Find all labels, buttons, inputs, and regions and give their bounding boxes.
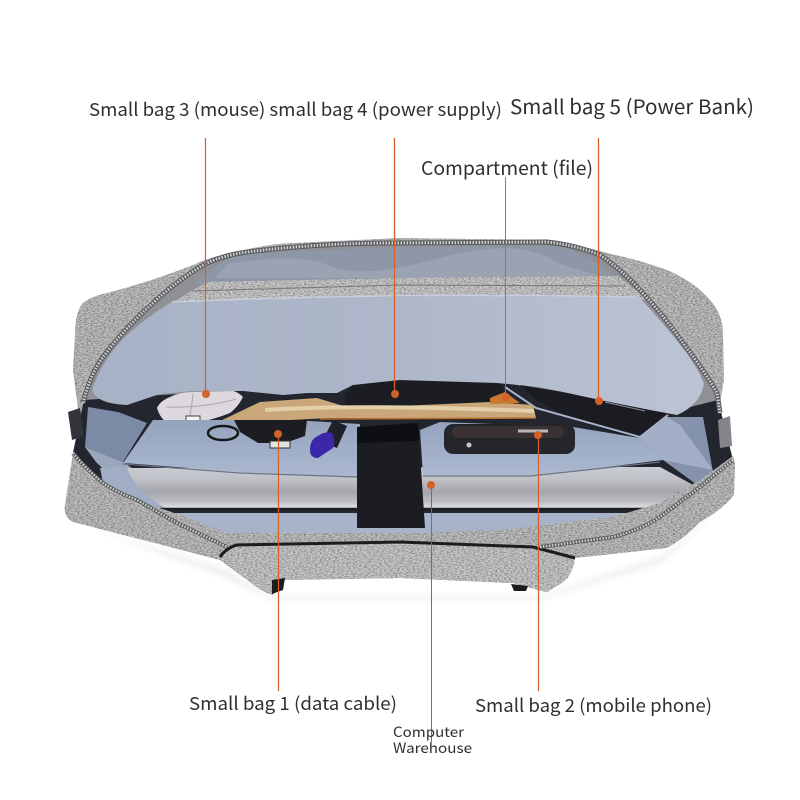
leader: small bag 4 — [391, 138, 399, 398]
right lining under laptop — [640, 487, 700, 517]
documents folder — [218, 398, 536, 422]
lower shell — [65, 453, 735, 595]
leader: small bag 5 — [595, 138, 603, 405]
front black trim — [220, 542, 575, 558]
interior dark lower — [73, 382, 733, 517]
power bank / phone — [444, 424, 575, 454]
mouse — [157, 391, 243, 425]
label: computer warehouse — [393, 722, 472, 758]
upper zipper — [83, 242, 720, 413]
right side lining — [640, 417, 713, 487]
front band highlight — [220, 542, 575, 595]
feet — [272, 578, 285, 594]
leader: small bag 1 — [274, 430, 282, 691]
power supply black — [345, 380, 505, 406]
label: small bag 1: Small bag 1 (data cable) — [189, 690, 397, 716]
ground shadow — [90, 510, 720, 600]
label: small bag 5: Small bag 5 (Power Bank) — [510, 91, 754, 120]
interior base — [73, 242, 733, 547]
folder pocket seam — [505, 387, 668, 437]
label: compartment: Compartment (file) — [421, 154, 593, 181]
power bank black — [520, 385, 668, 438]
back lining — [196, 246, 620, 284]
label: computer warehouse: Warehouse — [393, 738, 472, 758]
right side buckle — [718, 416, 732, 448]
left side buckle — [68, 408, 84, 440]
blue USB drive — [322, 420, 347, 448]
padded divider — [93, 296, 704, 415]
leader: compartment — [502, 177, 510, 401]
black strap — [357, 423, 425, 528]
laptop — [127, 467, 697, 508]
left side lining — [85, 407, 147, 462]
front pocket left — [123, 420, 360, 477]
label: small bag 2: Small bag 2 (mobile phone) — [475, 692, 712, 718]
label: small bag 3 and 4: Small bag 3 (mouse) small bag 4 (power supply) — [89, 96, 502, 122]
bag photo: open laptop bag — [65, 238, 735, 600]
upper shell — [73, 238, 724, 425]
leader: small bag 2 — [534, 431, 542, 691]
left lining under laptop — [100, 466, 170, 516]
lower zipper — [73, 453, 733, 547]
leader: small bag 3 — [202, 138, 210, 398]
leader: computer warehouse — [427, 481, 435, 742]
data cable coil — [208, 420, 307, 448]
front pocket right — [420, 422, 663, 475]
bottom lining — [170, 513, 650, 533]
label: computer warehouse: Computer — [393, 722, 465, 742]
grey back edge band — [168, 276, 648, 305]
